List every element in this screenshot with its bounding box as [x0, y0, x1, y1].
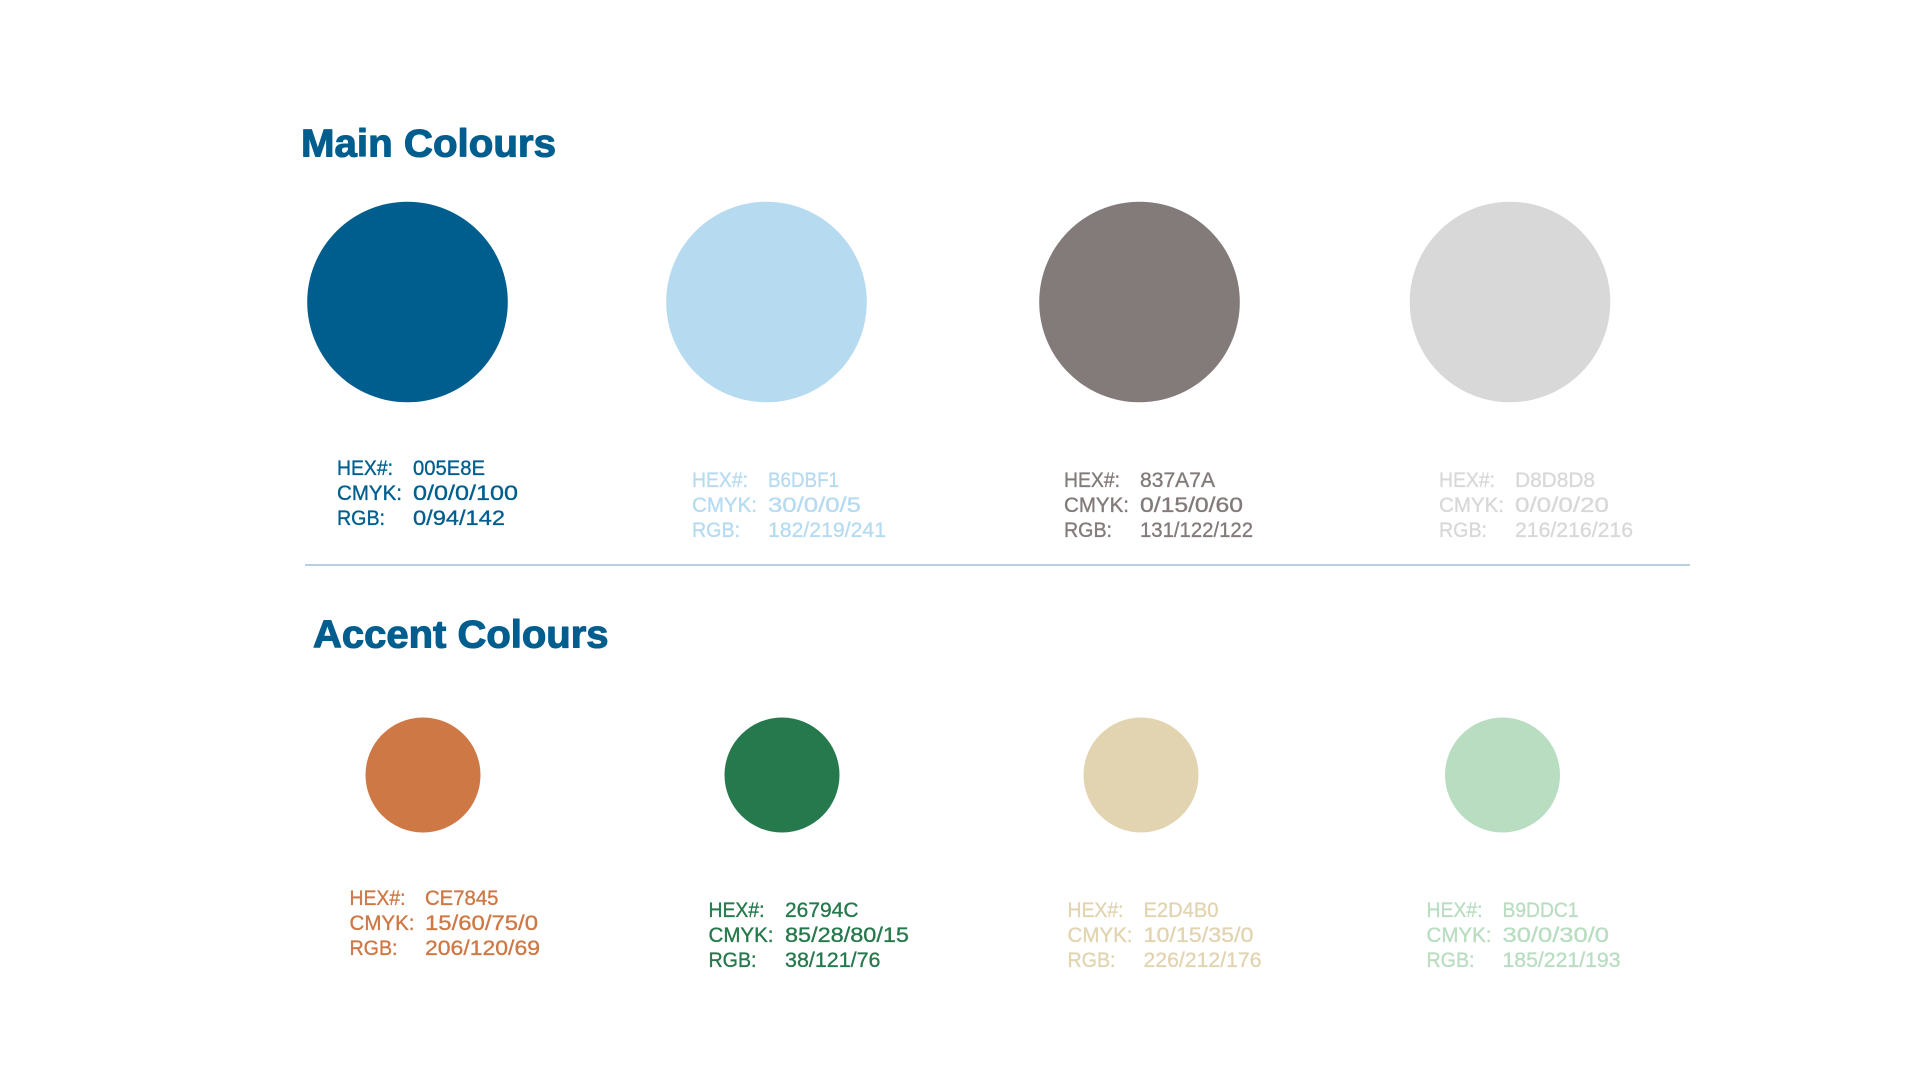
panel: swatch 005E8E	[307, 202, 518, 530]
circle swatch	[366, 718, 480, 832]
colour values: CE7845	[425, 886, 499, 910]
colour values: 10/15/35/0	[1144, 923, 1254, 947]
colour values	[1426, 898, 1621, 972]
colour values: CMYK:	[1439, 493, 1504, 517]
colour values: 26794C	[785, 898, 858, 922]
heading: Main Colours: Main Colours	[301, 122, 556, 166]
circle swatch	[1410, 202, 1610, 402]
colour values: RGB:	[1426, 948, 1474, 972]
colour values: E2D4B0	[1144, 898, 1219, 922]
colour values: 005E8E	[413, 456, 485, 480]
circle swatch	[724, 718, 840, 832]
circle swatch	[666, 202, 867, 402]
panel: swatch B6DBF1	[666, 202, 886, 542]
colour values: HEX#:	[692, 468, 748, 492]
colour values: CMYK:	[1426, 923, 1492, 947]
colour values: CMYK:	[350, 911, 414, 935]
panel: swatch B9DDC1	[1426, 718, 1621, 972]
colour values: RGB:	[1064, 518, 1112, 542]
colour values: HEX#:	[337, 456, 393, 480]
colour values: 226/212/176	[1144, 948, 1262, 972]
colour values: 30/0/0/5	[768, 493, 861, 517]
colour values: 837A7A	[1140, 468, 1216, 492]
colour values: D8D8D8	[1515, 468, 1595, 492]
colour values: 15/60/75/0	[425, 911, 538, 935]
colour values: CMYK:	[1064, 493, 1129, 517]
colour values: 185/221/193	[1502, 948, 1621, 972]
colour values: RGB:	[692, 518, 740, 542]
colour values	[1439, 468, 1633, 542]
colour values: RGB:	[337, 506, 385, 530]
colour values: RGB:	[350, 936, 398, 960]
colour values: 206/120/69	[425, 936, 540, 960]
colour values: CMYK:	[708, 923, 774, 947]
colour values: 85/28/80/15	[785, 923, 909, 947]
circle swatch	[1084, 718, 1198, 832]
colour values: 0/94/142	[413, 506, 505, 530]
panel: swatch 26794C	[708, 718, 909, 972]
colour values: 0/15/0/60	[1140, 493, 1243, 517]
colour values	[337, 456, 518, 530]
colour values: B6DBF1	[768, 468, 839, 492]
heading: Accent Colours: Accent Colours	[313, 614, 608, 656]
colour values: B9DDC1	[1502, 898, 1578, 922]
colour values: RGB:	[1439, 518, 1487, 542]
panel: swatch D8D8D8	[1410, 202, 1633, 542]
colour values: RGB:	[708, 948, 756, 972]
colour values	[708, 898, 909, 972]
colour values: CMYK:	[1068, 923, 1132, 947]
colour values: CMYK:	[337, 481, 402, 505]
colour values: HEX#:	[708, 898, 764, 922]
colour values: 182/219/241	[768, 518, 886, 542]
colour values: 0/0/0/20	[1515, 493, 1609, 517]
colour values: 131/122/122	[1140, 518, 1253, 542]
colour values	[1068, 898, 1262, 972]
colour values	[692, 468, 886, 542]
panel: swatch E2D4B0	[1068, 718, 1262, 972]
circle swatch	[1445, 718, 1560, 832]
colour values: 38/121/76	[785, 948, 881, 972]
colour values	[350, 886, 540, 960]
colour values	[1064, 468, 1253, 542]
colour values: 30/0/30/0	[1502, 923, 1609, 947]
panel: swatch CE7845	[350, 718, 540, 960]
colour values: HEX#:	[1068, 898, 1124, 922]
colour values: CMYK:	[692, 493, 757, 517]
colour values: HEX#:	[1426, 898, 1482, 922]
panel: swatch 837A7A	[1039, 202, 1253, 542]
colour values: RGB:	[1068, 948, 1116, 972]
colour values: 216/216/216	[1515, 518, 1633, 542]
circle swatch	[1039, 202, 1240, 402]
circle swatch	[307, 202, 508, 402]
colour values: 0/0/0/100	[413, 481, 518, 505]
colour values: HEX#:	[1439, 468, 1495, 492]
colour values: HEX#:	[1064, 468, 1120, 492]
colour values: HEX#:	[350, 886, 406, 910]
